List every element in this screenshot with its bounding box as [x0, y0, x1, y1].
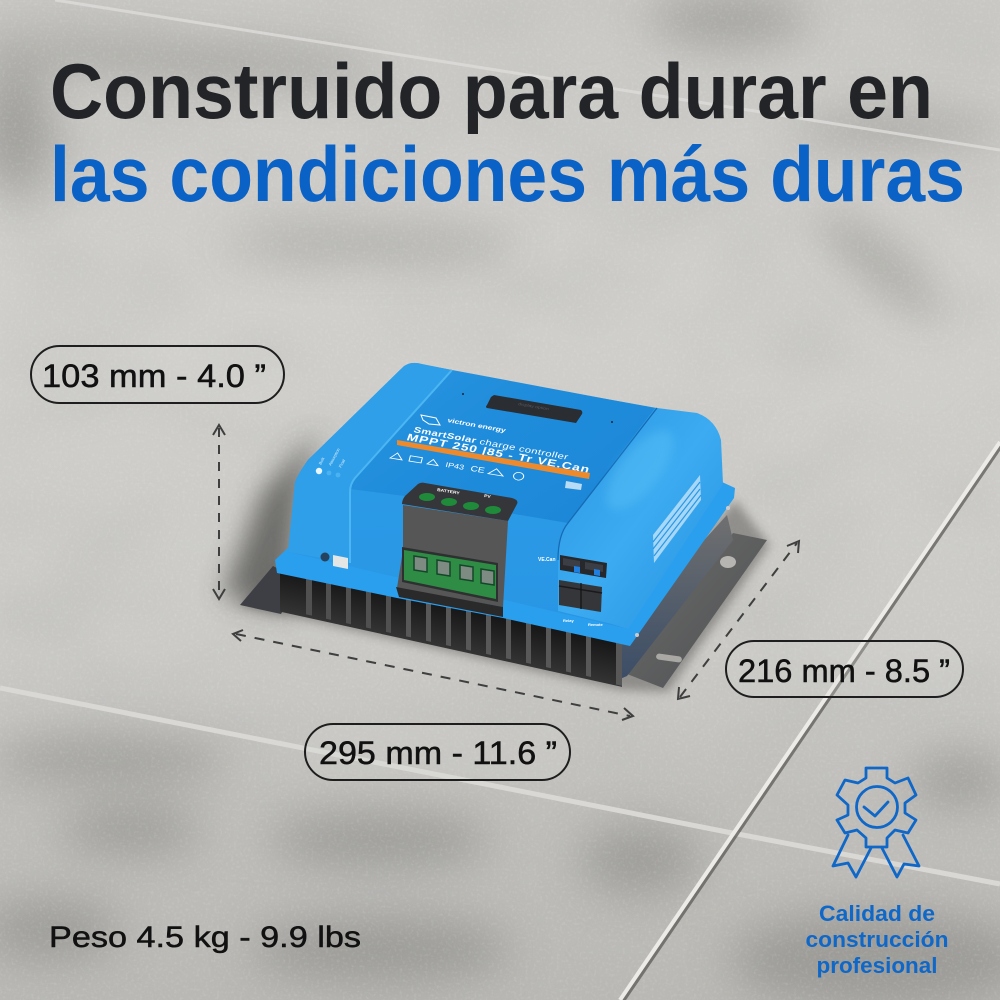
keyhole slots: [656, 556, 736, 663]
dimension: length arrow: [233, 630, 633, 720]
top-right seam: [558, 408, 657, 560]
relay connectors: Relay: [563, 618, 574, 623]
left small port: [320, 552, 348, 569]
left end cap: [288, 363, 452, 563]
housing front and top body: [288, 364, 657, 629]
terminal block: PV: [484, 493, 491, 499]
terminal block: [396, 483, 517, 617]
status LEDs: Bulk: [317, 456, 326, 465]
logo: victron energy: [446, 416, 508, 434]
right cap highlight: [595, 420, 685, 520]
status LEDs: Float: [337, 457, 346, 468]
orange band: [397, 440, 590, 479]
QR mark: [565, 481, 582, 490]
housing right cap: [558, 408, 723, 629]
display cover: display option: [518, 402, 550, 411]
label: height pill: 103 mm - 4.0 ”: [42, 358, 266, 394]
block foot: [396, 587, 503, 617]
mounting plate left: [240, 566, 300, 614]
product: MPPT charge controller: [240, 363, 767, 688]
cert marks: CE: [470, 464, 486, 475]
quality caption: profesional: [816, 953, 938, 978]
label: depth pill: 216 mm - 8.5 ”: [738, 653, 950, 689]
base flange: [275, 482, 735, 646]
green connector: [404, 550, 496, 599]
cert marks: [390, 451, 525, 481]
cert marks: IP43: [445, 461, 466, 472]
label: length pill: [305, 724, 570, 780]
block top: [402, 483, 517, 521]
quality caption: construcción: [806, 927, 948, 952]
housing top face: [296, 363, 655, 523]
label: length pill: 295 mm - 11.6 ”: [319, 735, 557, 771]
device shadow: [222, 432, 770, 692]
quality caption: [806, 901, 948, 978]
dimension: depth arrow: [678, 541, 799, 699]
heatsink fins: [280, 567, 622, 687]
screw dots: [462, 393, 613, 423]
weight text: Peso 4.5 kg - 9.9 lbs: [49, 921, 361, 954]
title: [50, 47, 965, 218]
block body: [397, 505, 508, 607]
logo: [421, 415, 508, 434]
relay connectors: [559, 580, 603, 627]
title: Construido para durar en: [50, 47, 933, 135]
relay connectors: Remote: [588, 622, 603, 627]
status LEDs: Absorption: [327, 447, 341, 466]
mounting plate right: [627, 533, 767, 688]
flange screws: [635, 506, 730, 637]
label: height pill: [31, 346, 284, 403]
icon: quality gear badge: [833, 768, 919, 877]
quality caption: Calidad de: [819, 901, 935, 926]
heatsink side: [620, 515, 733, 679]
product name text: MPPT 250 |85 - Tr VE.Can: [405, 431, 591, 475]
green cable holes: [419, 493, 501, 514]
VE.Can ports: VE.Can: [538, 557, 556, 563]
side label: [653, 475, 701, 563]
green connector frame: [402, 547, 498, 602]
tile joints: [55, 0, 1000, 150]
dimension: height arrow: [213, 425, 225, 599]
block labels: BATTERY: [437, 487, 460, 495]
status LEDs: [316, 447, 346, 477]
display cover: [486, 395, 582, 423]
VE.Can ports: [538, 555, 607, 578]
label: depth pill: [726, 641, 963, 697]
product name text: SmartSolar charge controller: [412, 426, 570, 462]
